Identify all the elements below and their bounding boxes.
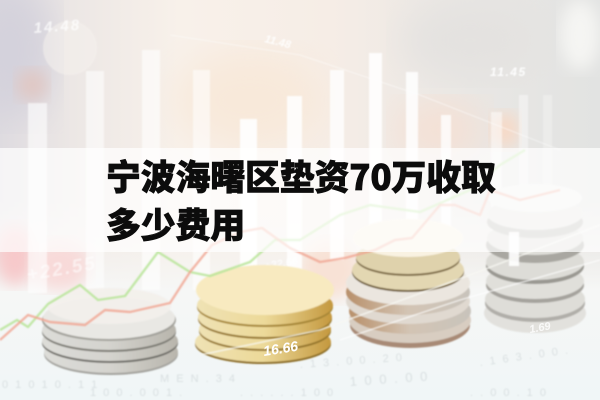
faint floating numbers: 11.45: [490, 65, 527, 79]
coin stack 4: faded silver: [484, 184, 586, 333]
title: [106, 150, 496, 249]
printed numbers on paper: 1 0 0 . 0 0: [349, 368, 430, 389]
translucent title band: [0, 148, 600, 252]
coin and stack labels: 1.69: [528, 320, 552, 336]
printed numbers on paper: . . . . . . 1 0 0: [240, 387, 335, 399]
printed numbers on paper: 1 0 0 . 0 0 1 .: [90, 387, 184, 399]
faint floating numbers: +32.66: [263, 255, 300, 273]
printed numbers on paper: . 1 3 . 0 0 . 2 0: [299, 352, 404, 371]
printed numbers on paper: . . 0 0 . 1 0: [470, 387, 548, 399]
printed numbers on paper: . 1 6 3 . 0 0 .: [479, 344, 571, 369]
coin stack 2: gold: [195, 265, 334, 364]
chart lines: green and red: [0, 35, 600, 355]
printed numbers on paper: 0 1 0 1 0 . 1 1: [2, 379, 99, 391]
translucent white bars: [28, 50, 552, 295]
coin and stack labels: 16.66: [262, 338, 299, 359]
title: 多少费用: [106, 198, 245, 249]
faint floating numbers: +22.55: [25, 253, 98, 286]
title: 宁波海曙区垫资70万收取: [106, 150, 496, 201]
coin and stack labels: [262, 320, 552, 359]
faint floating numbers: 11.48: [263, 33, 293, 52]
printed numbers on paper: M E N . 3 4: [160, 373, 237, 385]
printed numbers on paper: [2, 344, 571, 399]
faint floating numbers: 14.48: [33, 17, 82, 37]
coin stack 3: gold to bronze: [346, 219, 471, 348]
coin stack 1: silver: [42, 288, 178, 375]
soft bokeh colour: [0, 0, 600, 300]
faint floating numbers: [25, 17, 527, 286]
